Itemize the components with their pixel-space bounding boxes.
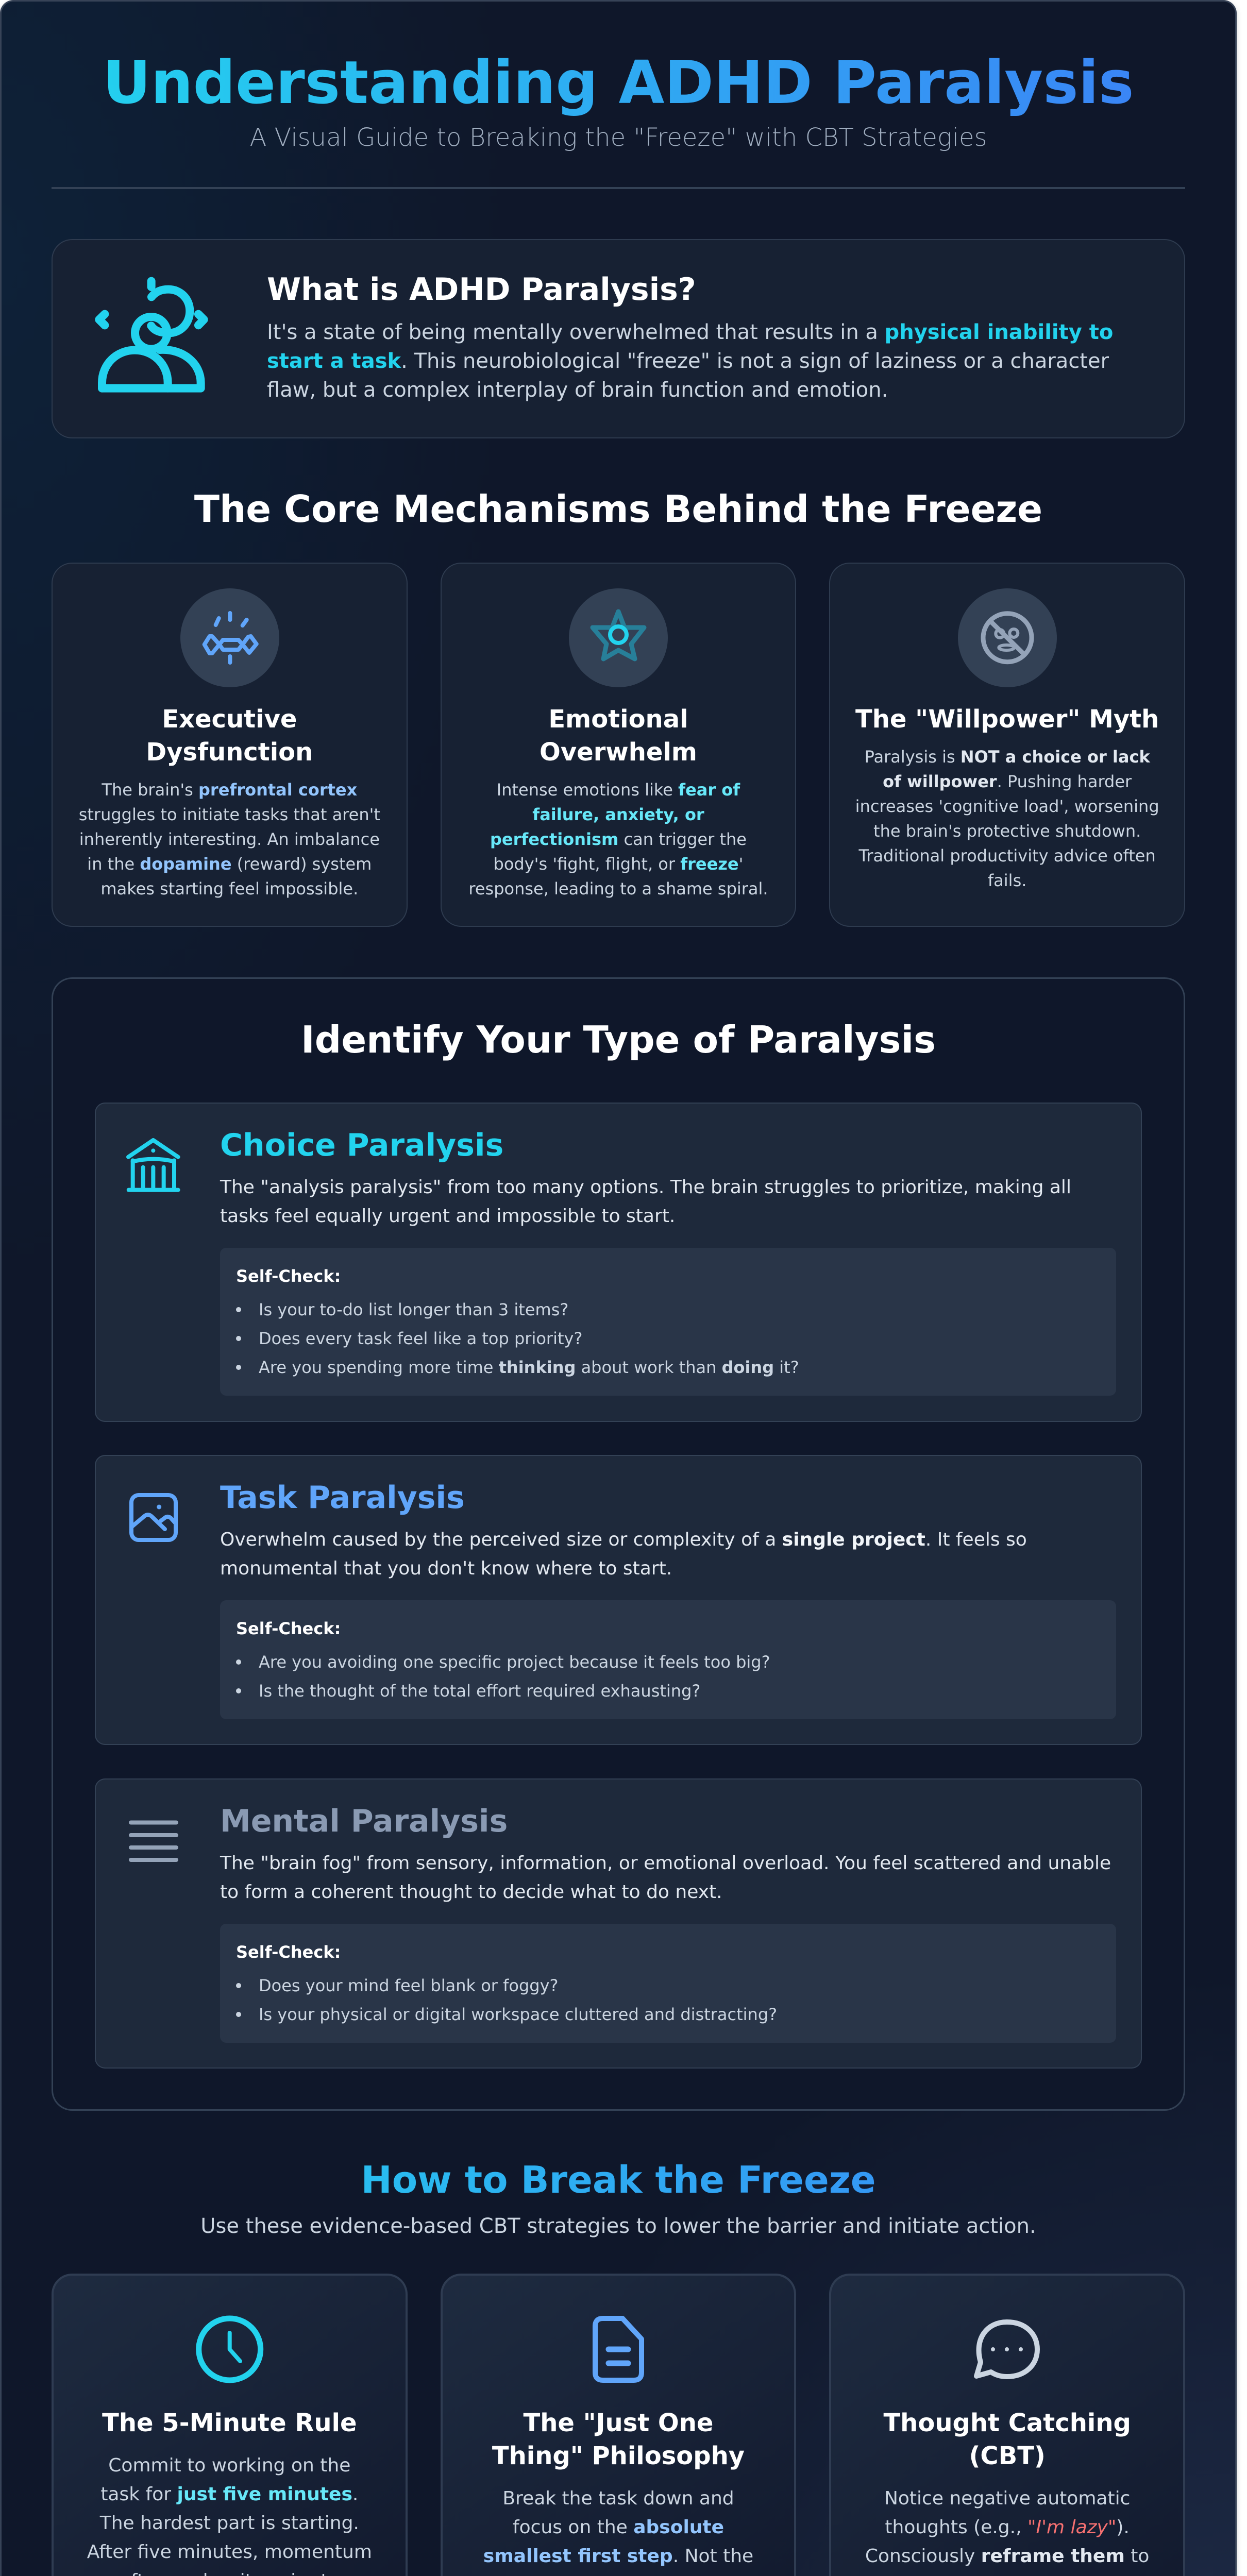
heading: What is ADHD Paralysis? <box>267 272 696 308</box>
card text: the brain's protective shutdown. <box>873 821 1141 841</box>
card heading <box>540 705 697 767</box>
icon: star with ring <box>569 588 668 687</box>
panel: mental paralysis <box>95 1778 1142 2069</box>
card text: failure, anxiety, or <box>532 805 704 824</box>
card text: Break the task down and <box>502 2488 734 2509</box>
card text: After five minutes, momentum <box>87 2541 372 2563</box>
self-check box <box>220 1924 1116 2043</box>
type description: tasks feel equally urgent and impossible to start. <box>220 1206 675 1226</box>
card text: Commit to working on the <box>108 2454 350 2476</box>
panel: identify your type <box>52 977 1185 2111</box>
card heading: The "Just One <box>523 2409 713 2437</box>
card text <box>855 747 1159 890</box>
card text: Consciously reframe them to <box>865 2546 1149 2567</box>
card heading: Thing" Philosophy <box>492 2442 745 2470</box>
card text: Notice negative automatic <box>884 2488 1130 2509</box>
panel: willpower myth <box>829 563 1185 927</box>
card text: response, leading to a shame spiral. <box>468 879 768 899</box>
card heading <box>441 2406 796 2472</box>
card text: Paralysis is NOT a choice or lack <box>865 747 1150 767</box>
card text: inherently interesting. An imbalance <box>79 829 380 849</box>
card heading: The "Willpower" Myth <box>855 705 1159 734</box>
self-check label: Self-Check: <box>236 1619 341 1638</box>
card heading: The 5-Minute Rule <box>102 2409 357 2437</box>
panel: just one thing <box>441 2274 796 2576</box>
type title: Task Paralysis <box>220 1480 465 1516</box>
icon: image <box>129 1493 178 1542</box>
type description: monumental that you don't know where to start. <box>220 1558 672 1579</box>
intro text <box>267 320 1113 402</box>
self-check list: Is your to-do list longer than 3 items? <box>259 1300 568 1319</box>
panel: task paralysis <box>95 1455 1142 1745</box>
heading: how to break the freeze: How to Break the Freeze <box>361 2158 876 2201</box>
self-check list: Does your mind feel blank or foggy? <box>259 1976 559 1995</box>
card text <box>79 780 380 899</box>
card text: Intense emotions like fear of <box>497 780 740 800</box>
title: Understanding ADHD Paralysis <box>103 48 1134 117</box>
self-check label: Self-Check: <box>236 1942 341 1962</box>
card heading: Executive <box>162 705 297 734</box>
type description: to form a coherent thought to decide what to do next. <box>220 1882 722 1902</box>
icon: speech bubble <box>973 2319 1040 2379</box>
card heading <box>146 705 313 767</box>
intro text: flaw, but a complex interplay of brain function and emotion. <box>267 378 888 402</box>
self-check list: Are you spending more time thinking about work than doing it? <box>259 1358 799 1377</box>
self-check list <box>236 1652 770 1701</box>
section intro: Use these evidence-based CBT strategies to lower the barrier and initiate action. <box>200 2214 1036 2238</box>
icon: crossed-out face <box>958 588 1057 687</box>
card text: in the dopamine (reward) system <box>87 854 372 874</box>
self-check list: Is the thought of the total effort required exhausting? <box>259 1681 700 1701</box>
icon: menu lines <box>129 1821 178 1862</box>
card text: Traditional productivity advice often <box>859 846 1156 866</box>
card text: The brain's prefrontal cortex <box>102 780 357 800</box>
type description: The "analysis paralysis" from too many options. The brain struggles to prioritize, making all <box>220 1177 1071 1197</box>
self-check list <box>236 1976 777 2024</box>
section heading: Identify Your Type of Paralysis <box>301 1018 936 1061</box>
type description <box>220 1177 1071 1226</box>
type description <box>220 1853 1111 1902</box>
card text: fails. <box>988 871 1026 890</box>
intro text: start a task. This neurobiological "freeze" is not a sign of laziness or a character <box>267 349 1109 373</box>
heading: core mechanisms: The Core Mechanisms Behind the Freeze <box>194 487 1042 531</box>
panel: what is ADHD paralysis <box>52 239 1185 438</box>
icon: building <box>126 1138 180 1192</box>
card text <box>87 2454 372 2576</box>
type description: The "brain fog" from sensory, information, or emotional overload. You feel scattered and unable <box>220 1853 1111 1873</box>
card text: increases 'cognitive load', worsening <box>855 796 1159 816</box>
card text <box>468 780 768 899</box>
card heading: Overwhelm <box>540 738 697 767</box>
type description: Overwhelm caused by the perceived size or complexity of a single project. It feels so <box>220 1529 1027 1550</box>
icon: document <box>593 2316 644 2383</box>
card heading <box>829 2406 1185 2472</box>
card text: focus on the absolute <box>513 2517 724 2538</box>
card text: makes starting feel impossible. <box>100 879 358 899</box>
panel: thought catching <box>829 2274 1185 2576</box>
intro text: It's a state of being mentally overwhelmed that results in a physical inability to <box>267 320 1113 344</box>
type description <box>220 1529 1027 1579</box>
card text: body's 'fight, flight, or freeze' <box>494 854 743 874</box>
panel: emotional overwhelm <box>441 563 796 927</box>
card text: The hardest part is starting. <box>100 2512 359 2534</box>
panel: choice paralysis <box>95 1103 1142 1422</box>
subtitle: A Visual Guide to Breaking the "Freeze" with CBT Strategies <box>249 123 987 152</box>
self-check list: Does every task feel like a top priority? <box>259 1329 582 1348</box>
card heading: (CBT) <box>969 2442 1046 2470</box>
icon: overwhelmed person with swirl <box>95 277 208 393</box>
icon: clock <box>196 2315 264 2383</box>
type title: Mental Paralysis <box>220 1803 508 1839</box>
card text: smallest first step. Not the <box>483 2546 753 2567</box>
card text <box>441 2484 796 2576</box>
self-check list: Is your physical or digital workspace cluttered and distracting? <box>259 2005 777 2024</box>
self-check box <box>220 1248 1116 1396</box>
self-check label: Self-Check: <box>236 1266 341 1286</box>
panel: executive dysfunction <box>52 563 408 927</box>
card text: of willpower. Pushing harder <box>883 772 1132 791</box>
card heading: Emotional <box>548 705 688 734</box>
self-check list: Are you avoiding one specific project because it feels too big? <box>259 1652 770 1672</box>
icon: broken chain links <box>180 588 279 687</box>
heading: how to break the freeze <box>52 2157 1185 2203</box>
card heading: Dysfunction <box>146 738 313 767</box>
card text: perfectionism can trigger the <box>490 829 747 849</box>
self-check box <box>220 1600 1116 1719</box>
card text: thoughts (e.g., "I'm lazy"). <box>885 2517 1130 2538</box>
card heading: Thought Catching <box>883 2409 1131 2437</box>
card text: task for just five minutes. <box>100 2483 358 2505</box>
card text <box>829 2484 1185 2576</box>
panel: five minute rule <box>52 2274 408 2576</box>
card text: struggles to initiate tasks that aren't <box>79 805 380 824</box>
self-check list <box>236 1300 799 1377</box>
type title: Choice Paralysis <box>220 1127 503 1163</box>
